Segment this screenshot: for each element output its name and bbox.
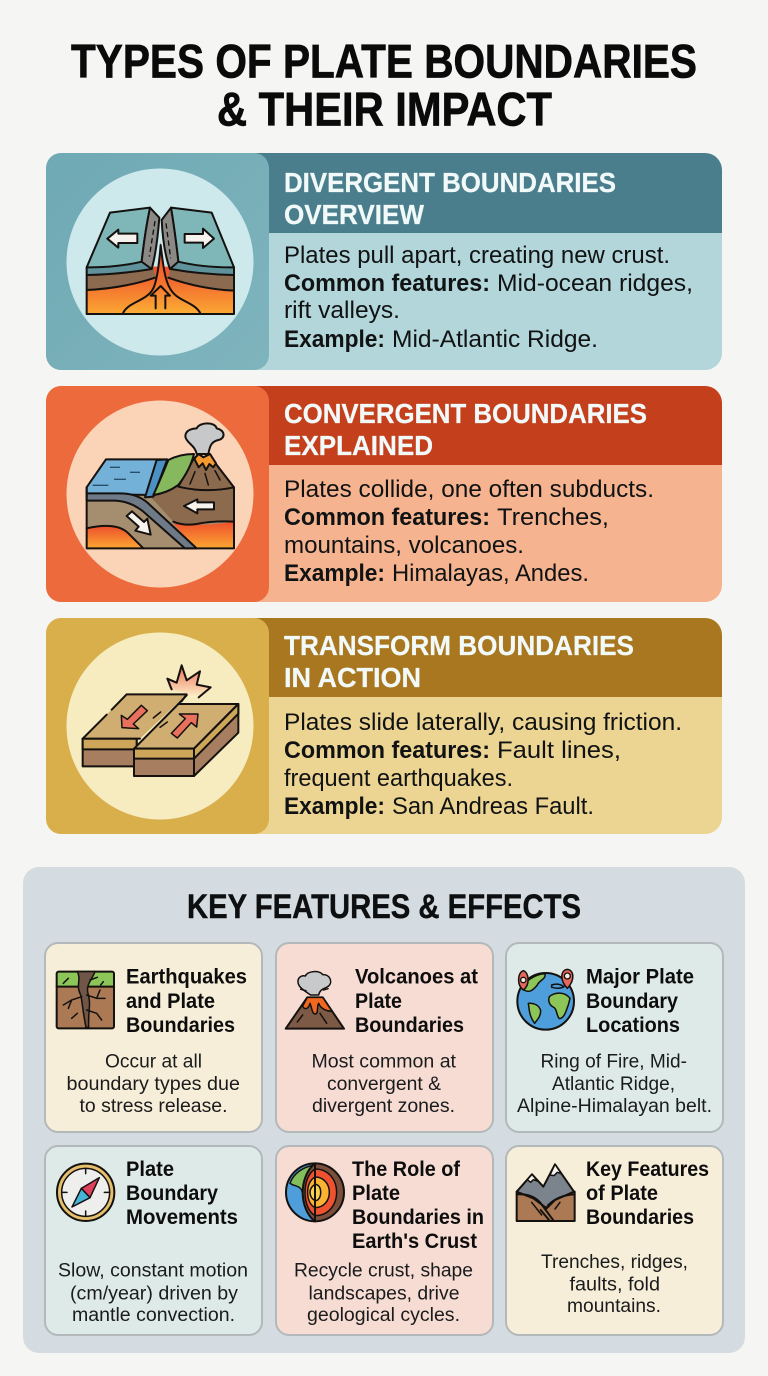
card text: landscapes, drive xyxy=(308,1284,460,1304)
icon: convergent subduction with volcano xyxy=(87,423,234,548)
text block: convergent description: Himalayas, Andes. xyxy=(392,560,589,587)
text block: divergent description: Example: xyxy=(284,326,385,353)
heading: convergent xyxy=(284,398,647,461)
text block: divergent description: rift valleys. xyxy=(284,297,400,324)
card title: Key Features xyxy=(586,1158,709,1181)
card title: and Plate xyxy=(126,990,215,1013)
card text xyxy=(312,1052,457,1117)
card text: Atlantic Ridge, xyxy=(552,1074,675,1095)
card text: to stress release. xyxy=(80,1096,228,1117)
card text: Slow, constant motion xyxy=(58,1260,248,1282)
text block: divergent description: Plates pull apart, creating new crust. xyxy=(284,242,670,269)
card text: Trenches, ridges, xyxy=(541,1252,688,1273)
card title: Plate xyxy=(355,990,402,1013)
card: volcanoes xyxy=(276,943,493,1132)
text block: divergent description: Common features: xyxy=(284,270,490,297)
card title: Plate xyxy=(126,1158,174,1181)
card title: Boundary xyxy=(586,990,678,1013)
heading: divergent: OVERVIEW xyxy=(284,199,424,230)
heading: transform: TRANSFORM BOUNDARIES xyxy=(284,630,634,661)
heading: transform: IN ACTION xyxy=(284,662,421,693)
card title xyxy=(352,1158,484,1253)
icon: transform fault blocks xyxy=(83,665,238,776)
title: & THEIR IMPACT xyxy=(217,82,552,136)
card title xyxy=(126,1158,238,1229)
text block: divergent description: Mid-ocean ridges, xyxy=(497,270,693,297)
card: earthquakes xyxy=(45,943,262,1132)
card title: Boundary xyxy=(126,1182,218,1205)
text block: divergent description xyxy=(284,242,693,353)
card title: Earth's Crust xyxy=(352,1230,477,1253)
card title: Earthquakes xyxy=(126,966,247,988)
card text xyxy=(66,1052,240,1117)
panel: key features and effects xyxy=(23,867,745,1353)
text block: transform description xyxy=(284,709,682,820)
card text: Alpine-Himalayan belt. xyxy=(517,1096,712,1117)
card title: Boundaries xyxy=(355,1014,464,1037)
card text: boundary types due xyxy=(66,1074,240,1095)
card title: Boundaries in xyxy=(352,1206,484,1229)
heading: divergent: DIVERGENT BOUNDARIES xyxy=(284,167,616,198)
text block: transform description: frequent earthquakes. xyxy=(284,765,513,792)
icon: compass xyxy=(57,1164,114,1221)
text block: transform description: Example: xyxy=(284,793,385,820)
card text: geological cycles. xyxy=(307,1305,460,1326)
card title xyxy=(355,966,478,1037)
icon: divergent plates pulling apart xyxy=(87,208,234,314)
card text: Occur at all xyxy=(105,1052,202,1072)
icon: globe with pins xyxy=(517,969,574,1030)
card: role in crust xyxy=(276,1146,493,1335)
card title xyxy=(586,966,694,1037)
heading: convergent: CONVERGENT BOUNDARIES xyxy=(284,398,647,429)
card text xyxy=(541,1252,688,1317)
card text: mountains. xyxy=(567,1296,661,1317)
card text: convergent & xyxy=(327,1074,441,1095)
text block: divergent description: Mid-Atlantic Ridge. xyxy=(392,326,598,353)
icon: volcano xyxy=(286,972,344,1029)
card title xyxy=(126,966,247,1037)
card: locations xyxy=(506,943,723,1132)
icon: fold mountains xyxy=(517,1164,575,1221)
heading: transform xyxy=(284,630,634,693)
card: key features xyxy=(506,1146,723,1335)
text block: convergent description: Common features: xyxy=(284,504,490,531)
text block: transform description: Plates slide laterally, causing friction. xyxy=(284,709,682,736)
card text xyxy=(58,1260,248,1326)
heading: divergent xyxy=(284,167,616,230)
card text xyxy=(294,1260,473,1326)
card title: Plate xyxy=(352,1182,400,1205)
heading: convergent: EXPLAINED xyxy=(284,430,433,461)
text block: convergent description: Plates collide, one often subducts. xyxy=(284,476,654,503)
card title: Volcanoes at xyxy=(355,966,478,988)
card title: Major Plate xyxy=(586,966,694,988)
card text: mantle convection. xyxy=(72,1305,235,1326)
text block: transform description: San Andreas Fault. xyxy=(392,793,594,820)
card title: Locations xyxy=(586,1014,680,1037)
panel: transform boundaries xyxy=(46,618,722,834)
card text xyxy=(517,1052,712,1117)
icon: cracked ground xyxy=(57,972,114,1028)
title xyxy=(71,34,697,136)
card title: of Plate xyxy=(586,1182,658,1205)
text block: convergent description: mountains, volcanoes. xyxy=(284,532,524,559)
text block: convergent description: Example: xyxy=(284,560,385,587)
icon: earth cross-section xyxy=(286,1163,344,1221)
card text: (cm/year) driven by xyxy=(70,1284,239,1304)
panel: divergent boundaries xyxy=(46,153,722,370)
card title xyxy=(586,1158,709,1229)
card text: faults, fold xyxy=(570,1274,660,1296)
text block: convergent description xyxy=(284,476,654,587)
card text: Most common at xyxy=(312,1052,457,1072)
text block: transform description: Fault lines, xyxy=(497,737,621,764)
card text: divergent zones. xyxy=(312,1096,455,1117)
card text: Ring of Fire, Mid- xyxy=(540,1052,687,1072)
text block: convergent description: Trenches, xyxy=(497,504,609,531)
text block: transform description: Common features: xyxy=(284,737,490,764)
card title: Boundaries xyxy=(586,1206,694,1229)
card title: Boundaries xyxy=(126,1014,235,1037)
card title: Movements xyxy=(126,1206,238,1229)
panel: convergent boundaries xyxy=(46,386,722,602)
card title: The Role of xyxy=(352,1158,461,1181)
heading: key features: KEY FEATURES & EFFECTS xyxy=(187,888,581,926)
card: movements xyxy=(45,1146,262,1335)
card text: Recycle crust, shape xyxy=(294,1260,473,1282)
